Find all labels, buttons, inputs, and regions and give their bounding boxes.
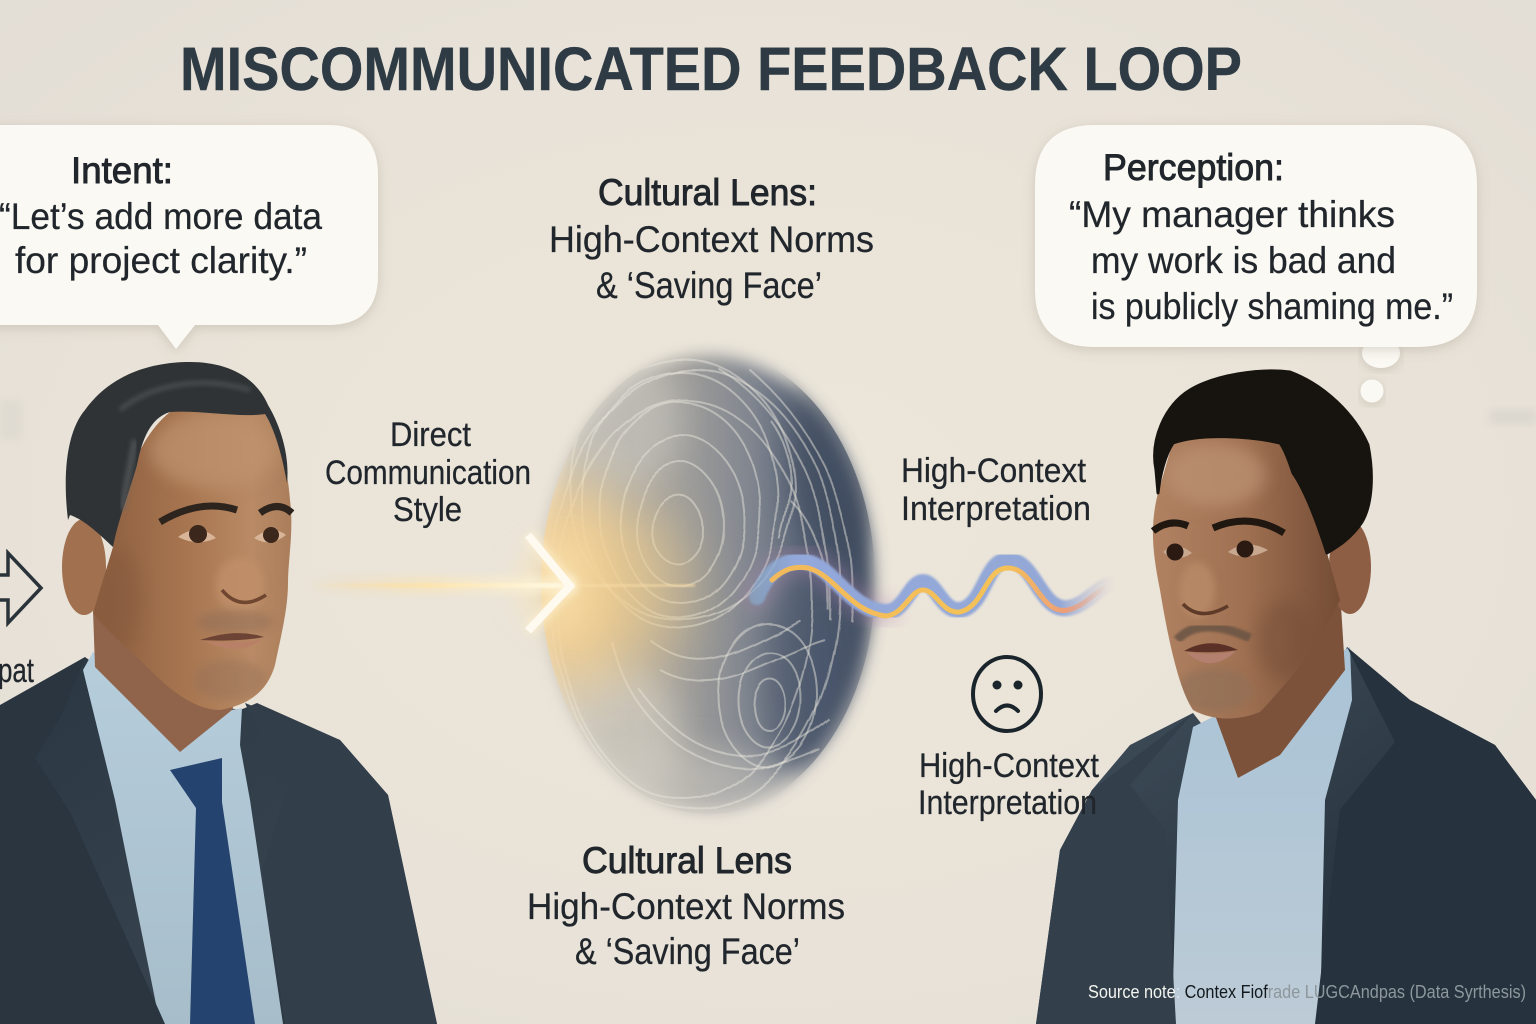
wave: distorted message [757, 560, 1110, 616]
left label: direct communication style: Communication [325, 454, 531, 492]
left label: direct communication style [325, 416, 531, 529]
tie [170, 758, 255, 1024]
nose [222, 590, 266, 602]
right lapel [245, 703, 437, 1024]
left lapel [1036, 713, 1193, 1024]
lower cultural lens label: Cultural Lens [582, 840, 792, 881]
lower cultural lens label: & ‘Saving Face’ [575, 931, 800, 972]
upper cultural lens label: Cultural Lens: [598, 172, 817, 213]
neck [1215, 590, 1345, 778]
left lapel [0, 657, 165, 1024]
lower right label: high-context interpretation: Interpretation [918, 784, 1097, 822]
face [93, 408, 291, 710]
ear [62, 519, 106, 615]
lower cultural lens label [527, 840, 845, 972]
right label: high-context interpretation: High-Context [901, 452, 1087, 490]
lower right label: high-context interpretation: High-Context [919, 747, 1100, 785]
ear [1329, 520, 1371, 614]
jacket [1036, 647, 1536, 1024]
nose [1183, 604, 1228, 614]
speech bubble: perception: “My manager thinks [1069, 194, 1395, 235]
speech bubble: perception: Perception: [1103, 147, 1284, 188]
speech bubble: intent: Intent: [71, 150, 173, 191]
upper cultural lens label [549, 172, 874, 306]
left label: direct communication style: Direct [390, 416, 471, 454]
neck [93, 610, 250, 752]
face [1153, 437, 1340, 718]
speech bubble: intent: “Let’s add more data [0, 196, 322, 237]
upper cultural lens label: High-Context Norms [549, 219, 874, 260]
hair [66, 362, 288, 547]
shirt and collar [83, 652, 283, 1024]
brows and eyes [1153, 521, 1284, 533]
speech bubble: intent [0, 125, 378, 349]
left label: direct communication style: Style [393, 491, 462, 529]
arrow: glowing direct message [300, 535, 695, 631]
speech bubble: perception [1035, 125, 1477, 402]
right label: high-context interpretation: Interpretation [901, 490, 1091, 528]
icon: sad face [973, 657, 1041, 731]
title: MISCOMMUNICATED FEEDBACK LOOP [180, 35, 1242, 103]
right lapel [1315, 647, 1536, 1024]
speech bubble: intent: for project clarity.” [15, 240, 307, 281]
moustache [1177, 627, 1250, 640]
mouth [1184, 643, 1238, 652]
person: employee [1036, 371, 1536, 1024]
shirt and collar [1172, 647, 1352, 1024]
brows and eyes [160, 506, 292, 522]
icon: cropped repeat arrow [0, 553, 41, 690]
lower cultural lens label: High-Context Norms [527, 886, 845, 927]
lower right label: high-context interpretation [918, 747, 1100, 822]
jacket [0, 657, 437, 1024]
speech bubble: perception: my work is bad and [1091, 240, 1396, 281]
hair [1155, 371, 1371, 553]
right label: high-context interpretation [901, 452, 1091, 528]
mouth [200, 633, 264, 641]
speech bubble: perception: is publicly shaming me.” [1091, 286, 1453, 327]
cultural lens orb [505, 340, 890, 830]
upper cultural lens label: & ‘Saving Face’ [596, 265, 822, 306]
person: manager [0, 362, 437, 1024]
